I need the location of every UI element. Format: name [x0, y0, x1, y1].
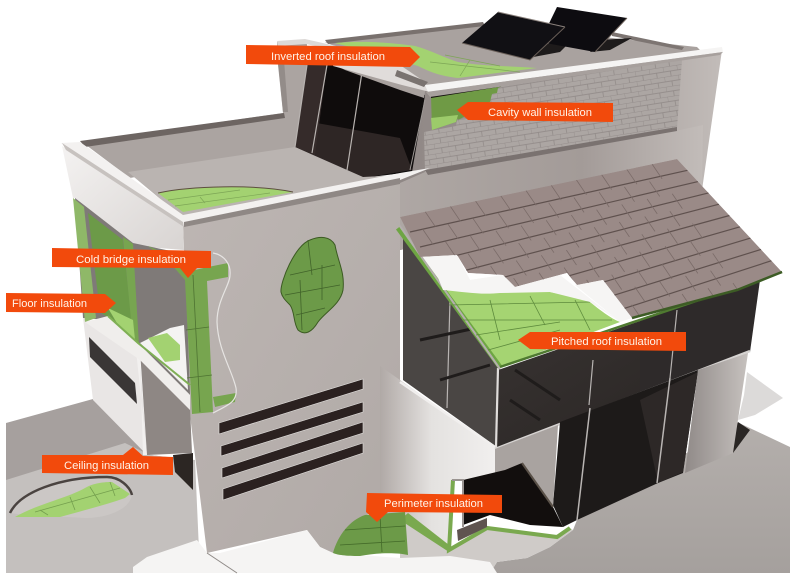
wall below brickwork: [400, 125, 703, 250]
brick sill stripe: [425, 127, 677, 175]
lower glazing: [553, 370, 698, 527]
roof eave brackets: [632, 272, 782, 318]
ground plane: [6, 372, 790, 573]
insulation: cold bridge column: [148, 246, 236, 414]
label: floor insulation: Floor insulation: [12, 298, 87, 310]
top-floor glazing: [295, 64, 426, 178]
label: cavity wall insulation: [457, 102, 613, 122]
label: perimeter insulation: [366, 493, 502, 522]
roof tiles: [400, 159, 781, 318]
insulation: inverted roof: [335, 42, 537, 78]
insulation: ceiling hole: [10, 477, 132, 518]
label: pitched roof insulation: [518, 332, 686, 351]
top roof plane: [325, 22, 700, 92]
label: perimeter insulation: Perimeter insulation: [384, 498, 483, 510]
insulation: cavity wall: [431, 84, 505, 130]
terrace parapet: [61, 142, 430, 227]
label: cold bridge insulation: [52, 248, 211, 278]
foreground rubble and steps: [133, 515, 573, 573]
insulation: floor and balcony opening: [73, 198, 190, 410]
insulation: terrace patch: [158, 187, 293, 212]
back wall of terrace: [80, 40, 307, 178]
label: cavity wall insulation: Cavity wall insulation: [488, 107, 592, 119]
upper parapet: [277, 39, 723, 97]
label: ceiling insulation: [42, 447, 173, 475]
conservatory glazing: [400, 235, 782, 449]
label: ceiling insulation: Ceiling insulation: [64, 460, 149, 472]
side window: [89, 337, 137, 404]
front facade wall: [183, 180, 400, 553]
lower grey panels: [495, 353, 748, 507]
label: floor insulation: [6, 293, 116, 313]
insulation: perimeter: [333, 512, 408, 556]
label: inverted roof insulation: [246, 45, 420, 67]
label: cold bridge insulation: Cold bridge insulation: [76, 254, 186, 266]
label: inverted roof insulation: Inverted roof insulation: [271, 51, 385, 63]
brick wall: [424, 60, 682, 172]
left side wall: [62, 146, 192, 455]
lower white wall under conservatory: [380, 366, 495, 552]
upper storey wall: [400, 50, 722, 250]
wall vents: [219, 379, 363, 500]
basement cutaway: [400, 463, 570, 552]
label: pitched roof insulation: Pitched roof insulation: [551, 336, 662, 348]
insulation: pitched roof: [397, 222, 782, 369]
solar panels: [462, 7, 632, 60]
terrace floor: [128, 147, 400, 218]
insulation: wall blob: [281, 237, 343, 333]
